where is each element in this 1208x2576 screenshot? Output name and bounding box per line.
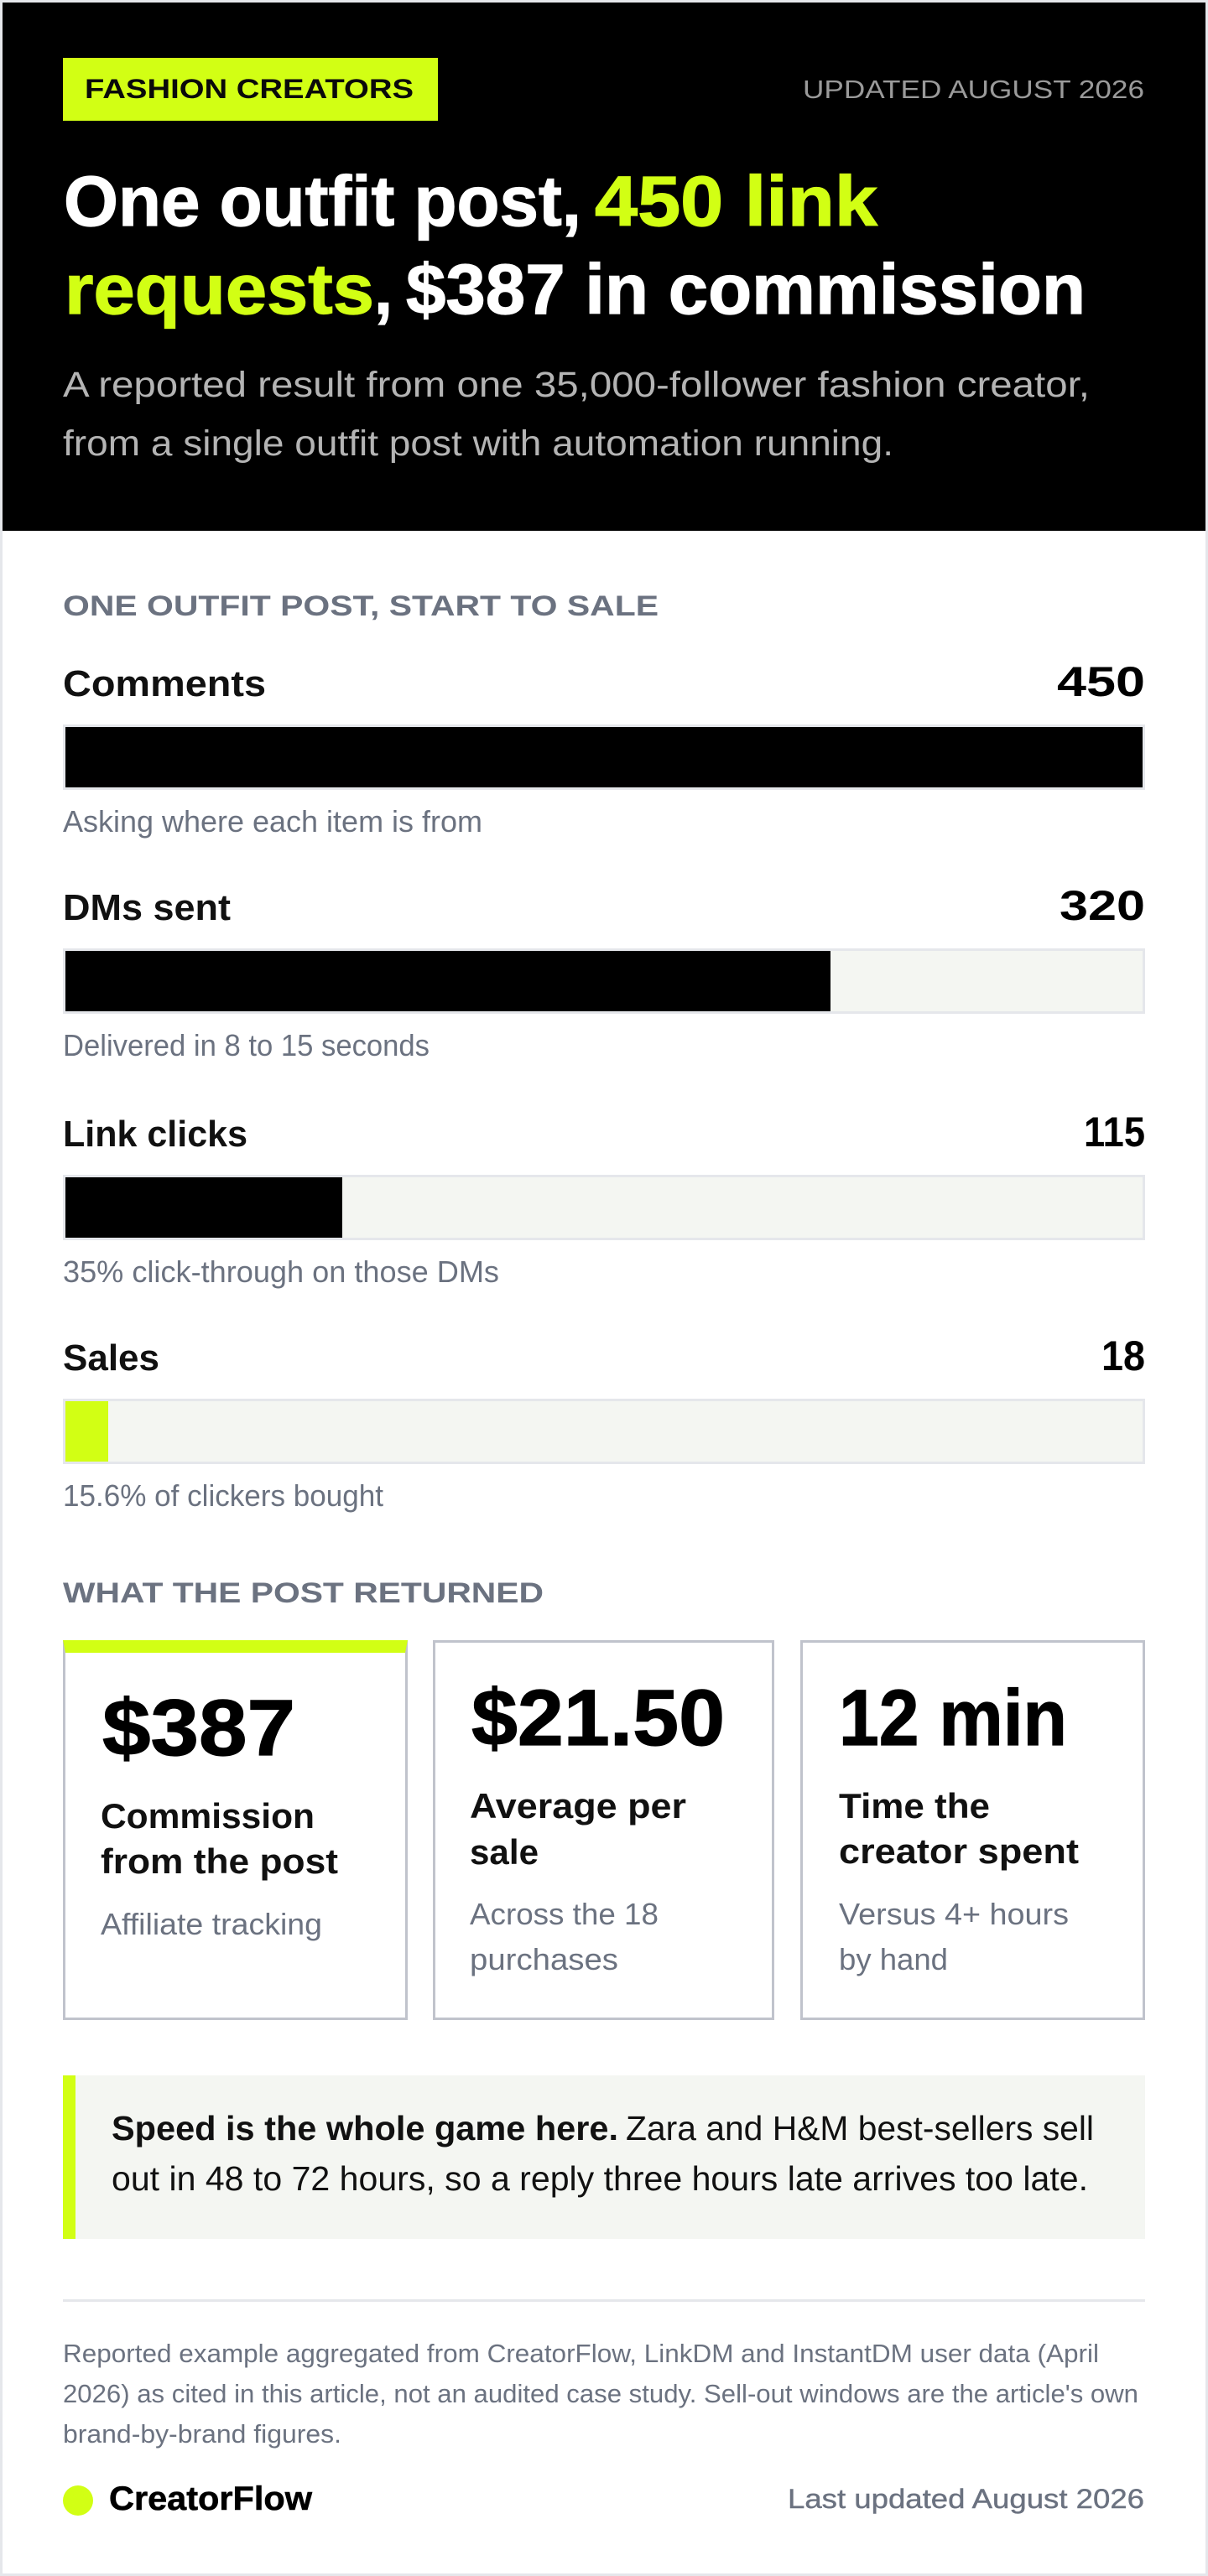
badge: fashion creators: FASHION CREATORS [85, 74, 414, 104]
funnel row: dms sent: Delivered in 8 to 15 seconds [63, 1028, 430, 1062]
funnel row: dms sent: DMs sent [63, 887, 231, 928]
stat card: average per sale: Average per [470, 1786, 686, 1826]
title: One outfit post, [64, 162, 581, 241]
funnel row: link clicks: Link clicks [63, 1114, 247, 1155]
funnel row: sales [63, 1332, 1145, 1513]
funnel row: sales: Sales [63, 1337, 159, 1379]
funnel row: comments: Asking where each item is from [63, 804, 482, 839]
title: 450 link [595, 162, 877, 241]
title [64, 162, 1086, 329]
stat card: commission: from the post [101, 1841, 338, 1881]
heading: funnel section: ONE OUTFIT POST, START TO SALE [63, 590, 659, 622]
stat card: average per sale: Across the 18 [470, 1897, 659, 1931]
title: requests [65, 250, 374, 329]
funnel row: comments [63, 658, 1145, 839]
title: $387 in commission [406, 250, 1086, 329]
stat card: time spent [802, 1642, 1144, 2019]
stat card: time spent: Time the [839, 1786, 990, 1826]
title: , [374, 250, 393, 329]
funnel row: dms sent: 320 [1060, 882, 1145, 929]
stat card: time spent: by hand [839, 1942, 948, 1976]
footnote: brand-by-brand figures. [63, 2419, 341, 2449]
funnel row: link clicks: 115 [1084, 1109, 1145, 1156]
stat card: average per sale [435, 1642, 773, 2019]
funnel row: comments: 450 [1057, 658, 1145, 705]
funnel row: dms sent [63, 882, 1145, 1062]
panel: header [3, 3, 1205, 531]
funnel row: comments: Comments [63, 663, 266, 704]
heading: returns section: WHAT THE POST RETURNED [63, 1577, 544, 1609]
bar chart: funnel [63, 658, 1145, 1513]
callout: Zara and H&M best-sellers sell [626, 2109, 1094, 2148]
stat card: commission: $387 [102, 1684, 295, 1773]
stat card: commission [63, 1640, 408, 2019]
footnote [63, 2339, 1138, 2449]
brand logo: CreatorFlow [109, 2480, 313, 2517]
stat card: commission: Commission [101, 1796, 315, 1836]
funnel row: sales: 15.6% of clickers bought [63, 1478, 383, 1513]
footnote: 2026) as cited in this article, not an audited case study. Sell-out windows are the article's own [63, 2379, 1138, 2408]
badge: fashion creators [63, 58, 438, 121]
footnote: Reported example aggregated from CreatorFlow, LinkDM and InstantDM user data (April [63, 2339, 1099, 2368]
updated date: UPDATED AUGUST 2026 [803, 75, 1144, 104]
subtitle: from a single outfit post with automation running. [63, 423, 893, 464]
callout: out in 48 to 72 hours, so a reply three hours late arrives too late. [112, 2159, 1088, 2198]
funnel row: sales: 18 [1101, 1332, 1145, 1379]
stat card: time spent: 12 min [839, 1674, 1067, 1763]
stat card: time spent: Versus 4+ hours [839, 1897, 1069, 1931]
stat card: average per sale: sale [470, 1832, 539, 1872]
callout: Speed is the whole game here. [112, 2109, 618, 2148]
stat card: average per sale: $21.50 [471, 1674, 725, 1763]
funnel row: link clicks: 35% click-through on those DMs [63, 1254, 499, 1289]
subtitle: A reported result from one 35,000-follower fashion creator, [63, 365, 1090, 405]
stat card: commission: Affiliate tracking [101, 1907, 322, 1941]
last updated: Last updated August 2026 [788, 2484, 1144, 2514]
stat card: time spent: creator spent [839, 1831, 1079, 1871]
stat card: average per sale: purchases [470, 1942, 618, 1976]
funnel row: link clicks [63, 1109, 1145, 1289]
subtitle [63, 365, 1090, 464]
callout [63, 2075, 1145, 2239]
